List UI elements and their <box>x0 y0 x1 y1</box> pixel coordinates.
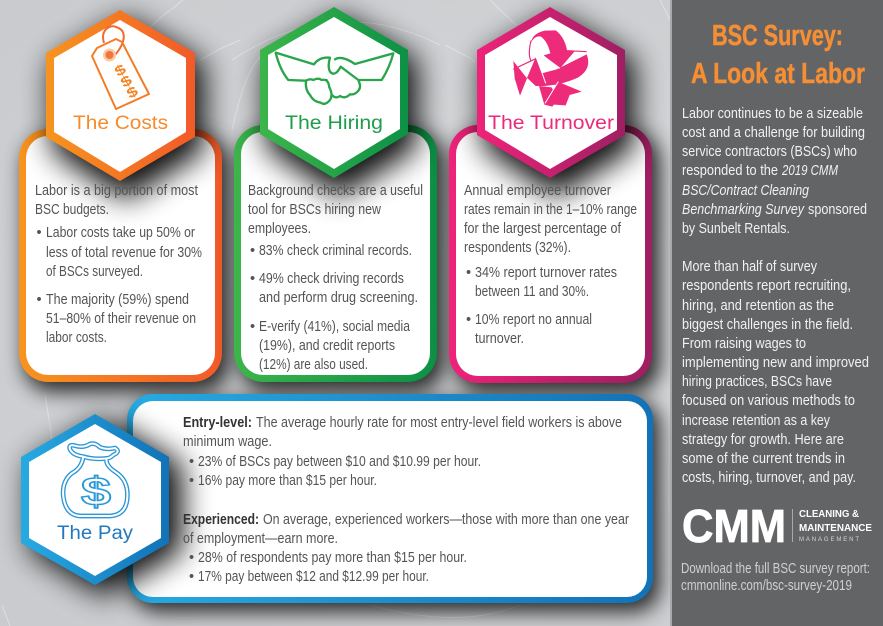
text: turnover intro <box>464 183 637 256</box>
text: hiring intro: Background checks are a useful <box>248 183 423 199</box>
text: hiring bullet 3: (12%) are also used. <box>259 357 368 373</box>
text: experienced <box>183 512 629 547</box>
text: costs intro <box>35 183 198 218</box>
text: experienced: On average, experienced workers—those with more than one year <box>263 512 629 528</box>
text: intro paragraph: responded to the <box>682 163 778 179</box>
hexagon: hiring <box>260 7 408 178</box>
text: experienced bullets <box>189 550 467 585</box>
logo: CMM: MANAGEMENT <box>799 537 859 543</box>
text: hiring intro: tool for BSCs hiring new <box>248 202 381 218</box>
text: intro paragraph: 2019 CMM <box>781 163 839 179</box>
panel: the turnover <box>449 7 660 393</box>
logo: CMM <box>682 500 872 552</box>
text: turnover intro: for the largest percentage of <box>464 221 622 237</box>
text: turnover bullet 1 <box>466 265 617 300</box>
icon: price tag: $ <box>124 82 141 102</box>
panel: the costs <box>19 10 230 392</box>
text: second paragraph: More than half of survey <box>682 259 818 275</box>
text: intro paragraph: service contractors (BSCs) who <box>682 144 857 160</box>
text: entry-level: Entry-level: <box>183 415 252 431</box>
icon: price tag: $ <box>112 60 129 80</box>
text: entry-level <box>183 415 622 450</box>
label: the pay: The Pay <box>57 523 134 544</box>
text: experienced: Experienced: <box>183 512 259 528</box>
icon: turnover arrows <box>513 30 588 107</box>
text: turnover intro: respondents (32%). <box>464 240 571 256</box>
card: costs <box>19 129 222 382</box>
icon: money bag: $ <box>81 470 111 514</box>
sidebar <box>670 0 883 626</box>
text: costs bullet 2 <box>36 292 196 346</box>
text: entry-level bullets: 23% of BSCs pay between $10 and $10.99 per hour. <box>198 454 481 470</box>
text: entry-level: The average hourly rate for most entry-level field workers is above <box>256 415 622 431</box>
text: turnover bullet 2: 10% report no annual <box>475 312 592 328</box>
text: entry-level bullets: 16% pay more than $15 per hour. <box>198 473 377 489</box>
text: turnover bullet 2 <box>466 312 592 347</box>
text: hiring intro <box>248 183 423 237</box>
text: costs bullet 1 <box>36 225 202 280</box>
text: costs intro: Labor is a big portion of most <box>35 183 198 199</box>
text: costs intro: BSC budgets. <box>35 202 109 218</box>
text: hiring bullet 3 <box>250 319 411 373</box>
text: hiring intro: employees. <box>248 221 311 237</box>
text: costs bullet 2: 51–80% of their revenue on <box>46 311 196 327</box>
hexagon: pay <box>21 414 169 585</box>
text: costs bullet 2: labor costs. <box>46 330 107 346</box>
card: turnover <box>449 125 652 383</box>
text: entry-level bullets <box>189 454 481 489</box>
icon: handshake <box>276 53 393 104</box>
text: hiring bullet 1: 83% check criminal records. <box>259 243 412 259</box>
panel: the hiring <box>234 7 445 392</box>
panel: the pay <box>21 394 660 612</box>
text: costs bullet 2: The majority (59%) spend <box>46 292 189 308</box>
text: costs bullet 1: of BSCs surveyed. <box>46 264 143 280</box>
label: the hiring: The Hiring <box>285 113 383 134</box>
text: turnover intro: rates remain in the 1–10% range <box>464 202 637 218</box>
text: turnover bullet 1: • <box>466 265 471 281</box>
text: turnover bullet 2: • <box>466 312 471 328</box>
logo: CMM: CMM <box>682 500 786 552</box>
text: entry-level bullets: • <box>189 473 194 489</box>
text: turnover intro: Annual employee turnover <box>464 183 611 199</box>
hexagon: costs <box>46 10 195 181</box>
text: costs bullet 2: • <box>36 292 42 308</box>
text: turnover bullet 2: turnover. <box>475 331 524 347</box>
icon: price tag <box>92 26 149 109</box>
text: experienced bullets: • <box>189 569 194 585</box>
text: second paragraph: respondents report recruiting, <box>682 278 851 294</box>
hexagon: turnover <box>477 7 625 178</box>
text: hiring bullet 2: and perform drug screening. <box>259 290 418 306</box>
label: the costs: The Costs <box>73 113 168 134</box>
text: second paragraph: hiring, and retention as the <box>682 298 834 314</box>
text: turnover bullet 1: 34% report turnover rates <box>475 265 617 281</box>
text: experienced bullets: 17% pay between $12 and $12.99 per hour. <box>198 569 429 585</box>
text: second paragraph <box>682 259 869 486</box>
card: hiring <box>234 125 437 382</box>
text: entry-level: minimum wage. <box>183 434 272 450</box>
text: intro paragraph: by Sunbelt Rentals. <box>682 221 790 237</box>
text: costs bullet 1: less of total revenue for 30% <box>46 245 202 261</box>
text: experienced bullets: • <box>189 550 194 566</box>
title <box>691 20 865 90</box>
logo: CMM: MAINTENANCE <box>799 522 872 534</box>
text: hiring bullet 3: (19%), and credit reports <box>259 338 395 354</box>
text: hiring bullet 2 <box>250 271 418 306</box>
text: costs bullet 1: Labor costs take up 50% or <box>46 225 195 241</box>
text: intro paragraph: Benchmarking Survey <box>682 202 805 218</box>
title: BSC Survey: <box>712 20 843 52</box>
card: pay <box>127 394 653 603</box>
text: second paragraph: some of the current trends in <box>682 451 845 467</box>
text: download link <box>681 561 870 594</box>
icon: money bag <box>63 444 127 516</box>
text: second paragraph: costs, hiring, turnover, and pay. <box>682 470 856 486</box>
text: hiring bullet 1: • <box>250 243 255 259</box>
text: second paragraph: From raising wages to <box>682 336 806 352</box>
text: hiring bullet 2: 49% check driving records <box>259 271 404 287</box>
text: second paragraph: biggest challenges in the field. <box>682 317 853 333</box>
text: intro paragraph <box>682 106 867 237</box>
text: hiring bullet 3: E-verify (41%), social media <box>259 319 411 335</box>
text: intro paragraph: BSC/Contract Cleaning <box>682 183 809 199</box>
text: intro paragraph: sponsored <box>808 202 867 218</box>
text: second paragraph: strategy for growth. Here are <box>682 432 844 448</box>
label: the turnover: The Turnover <box>488 113 615 134</box>
text: second paragraph: increase retention as a key <box>682 413 831 429</box>
logo: CMM: CLEANING & <box>799 508 859 520</box>
text: experienced: of employment—earn more. <box>183 531 338 547</box>
text: second paragraph: hiring practices, BSCs have <box>682 374 832 390</box>
text: experienced bullets: 28% of respondents pay more than $15 per hour. <box>198 550 467 566</box>
text: costs bullet 1: • <box>36 225 42 241</box>
text: second paragraph: focused on various methods to <box>682 393 855 409</box>
text: entry-level bullets: • <box>189 454 194 470</box>
text: hiring bullet 3: • <box>250 319 255 335</box>
text: hiring bullet 2: • <box>250 271 255 287</box>
icon: price tag: $ <box>118 71 135 91</box>
text: turnover bullet 1: between 11 and 30%. <box>475 284 589 300</box>
